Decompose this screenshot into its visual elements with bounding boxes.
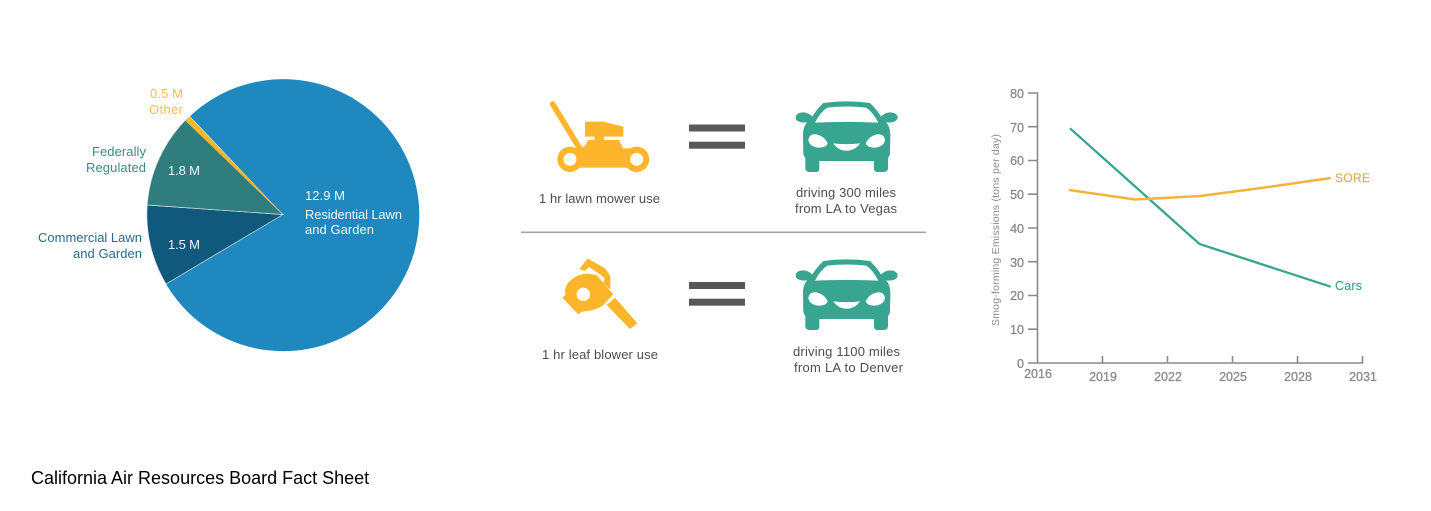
text: driving 300 miles caption bbox=[795, 185, 898, 216]
x axis tick labels: 2022 bbox=[1154, 370, 1182, 384]
y axis tick labels: 80 bbox=[1010, 87, 1024, 101]
text: lawn mower caption: 1 hr lawn mower use bbox=[539, 191, 660, 206]
panel: pie chart of emissions by source bbox=[38, 79, 419, 351]
x axis tick labels: 2025 bbox=[1219, 370, 1247, 384]
label: federally regulated value: 1.8 M bbox=[168, 163, 200, 178]
footer source note: California Air Resources Board Fact Sheet bbox=[31, 468, 369, 488]
label: commercial lawn and garden bbox=[38, 230, 142, 261]
label: federally regulated: Federally bbox=[92, 144, 146, 159]
label: residential: 12.9 M bbox=[305, 188, 345, 203]
slice: other bbox=[185, 116, 283, 214]
divider bbox=[521, 232, 926, 233]
text: driving 300 miles caption: from LA to Vegas bbox=[795, 201, 898, 216]
y axis tick labels: 10 bbox=[1010, 323, 1024, 337]
text: leaf blower caption: 1 hr leaf blower use bbox=[542, 347, 658, 362]
text: driving 300 miles caption: driving 300 miles bbox=[796, 185, 896, 200]
slice: commercial lawn and garden bbox=[147, 205, 283, 284]
y axis tick labels bbox=[1010, 87, 1024, 371]
label: federally regulated: Regulated bbox=[86, 160, 146, 175]
x axis tick labels: 2031 bbox=[1349, 370, 1377, 384]
x axis tick labels: 2028 bbox=[1284, 370, 1312, 384]
text: driving 1100 miles caption: driving 1100 miles bbox=[793, 344, 900, 359]
icon: lawn mower bbox=[553, 104, 649, 172]
icon: car, bottom bbox=[796, 259, 898, 330]
label: other bbox=[149, 86, 184, 117]
label: federally regulated bbox=[86, 144, 146, 175]
label: SORE: SORE bbox=[1335, 171, 1370, 185]
y axis tick labels: 20 bbox=[1010, 289, 1024, 303]
label: residential: Residential Lawn bbox=[305, 207, 402, 222]
icon: car, top bbox=[796, 101, 898, 172]
label: residential: and Garden bbox=[305, 222, 374, 237]
x axis tick labels bbox=[1024, 367, 1377, 384]
label: other: Other bbox=[149, 102, 184, 117]
y axis tick labels: 70 bbox=[1010, 121, 1024, 135]
text: driving 1100 miles caption: from LA to Denver bbox=[794, 360, 904, 375]
x axis tick labels: 2019 bbox=[1089, 370, 1117, 384]
icon: equals sign, bottom bbox=[689, 282, 745, 306]
y axis tick labels: 40 bbox=[1010, 222, 1024, 236]
y axis tick labels: 50 bbox=[1010, 188, 1024, 202]
label: cars: Cars bbox=[1335, 279, 1362, 293]
label: commercial lawn and garden: Commercial Lawn bbox=[38, 230, 142, 245]
line: cars bbox=[1070, 128, 1331, 287]
panel: emissions line chart bbox=[990, 87, 1377, 384]
icon: equals sign, top bbox=[689, 124, 745, 149]
slice: residential lawn and garden bbox=[166, 79, 419, 351]
y axis tick labels: 0 bbox=[1017, 357, 1024, 371]
label: commercial value: 1.5 M bbox=[168, 237, 200, 252]
y axis tick labels: 60 bbox=[1010, 154, 1024, 168]
icon: leaf blower bbox=[562, 258, 637, 329]
text: driving 1100 miles caption bbox=[793, 344, 904, 375]
y axis title: Smog-forming Emissions (tons per day) bbox=[990, 134, 1002, 326]
line: SORE bbox=[1069, 178, 1331, 200]
panel: equivalence comparison bbox=[521, 101, 926, 375]
chart axes bbox=[1028, 93, 1362, 363]
label: commercial lawn and garden: and Garden bbox=[73, 246, 142, 261]
x axis tick labels: 2016 bbox=[1024, 367, 1052, 381]
y axis tick labels: 30 bbox=[1010, 256, 1024, 270]
label: other: 0.5 M bbox=[150, 86, 183, 101]
label: residential bbox=[305, 188, 402, 237]
slice: federally regulated bbox=[147, 120, 283, 214]
